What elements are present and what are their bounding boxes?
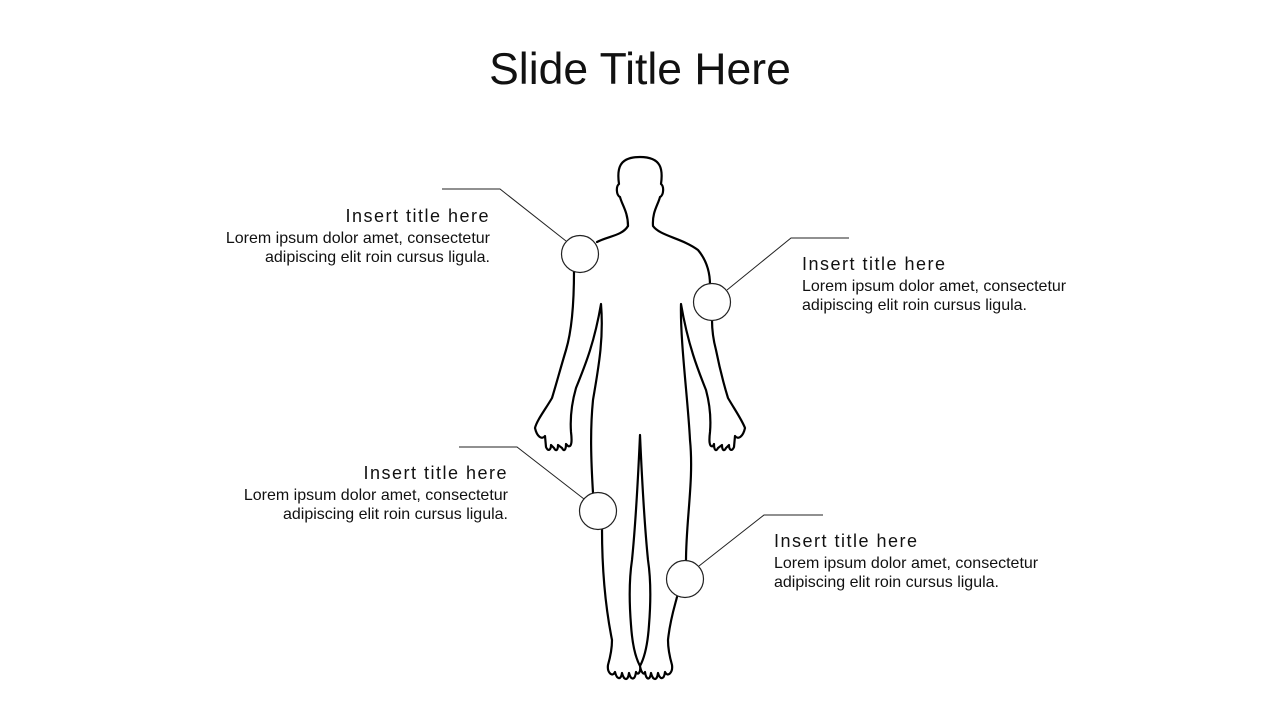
text block: top left: Insert title here bbox=[345, 206, 490, 226]
text block: bottom right: adipiscing elit roin cursus ligula. bbox=[774, 574, 999, 591]
text block: top left bbox=[226, 206, 490, 266]
connector lines bbox=[442, 189, 849, 566]
text block: bottom left: Lorem ipsum dolor amet, consectetur bbox=[244, 487, 508, 504]
body outline bbox=[535, 157, 745, 679]
text block: top right: adipiscing elit roin cursus ligula. bbox=[802, 297, 1027, 314]
text block: bottom left bbox=[244, 463, 508, 523]
title: Slide Title Here bbox=[489, 45, 791, 94]
text block: top left: adipiscing elit roin cursus ligula. bbox=[265, 249, 490, 266]
text block: top left: Lorem ipsum dolor amet, consectetur bbox=[226, 230, 490, 247]
text block: bottom right: Lorem ipsum dolor amet, consectetur bbox=[774, 555, 1038, 572]
text block: top right: Lorem ipsum dolor amet, consectetur bbox=[802, 278, 1066, 295]
text block: bottom right: Insert title here bbox=[774, 531, 919, 551]
text block: top right: Insert title here bbox=[802, 254, 947, 274]
text block: bottom left: adipiscing elit roin cursus ligula. bbox=[283, 506, 508, 523]
text block: bottom left: Insert title here bbox=[363, 463, 508, 483]
text block: bottom right bbox=[774, 531, 1038, 591]
text block: top right bbox=[802, 254, 1066, 314]
marker circles bbox=[562, 236, 730, 598]
